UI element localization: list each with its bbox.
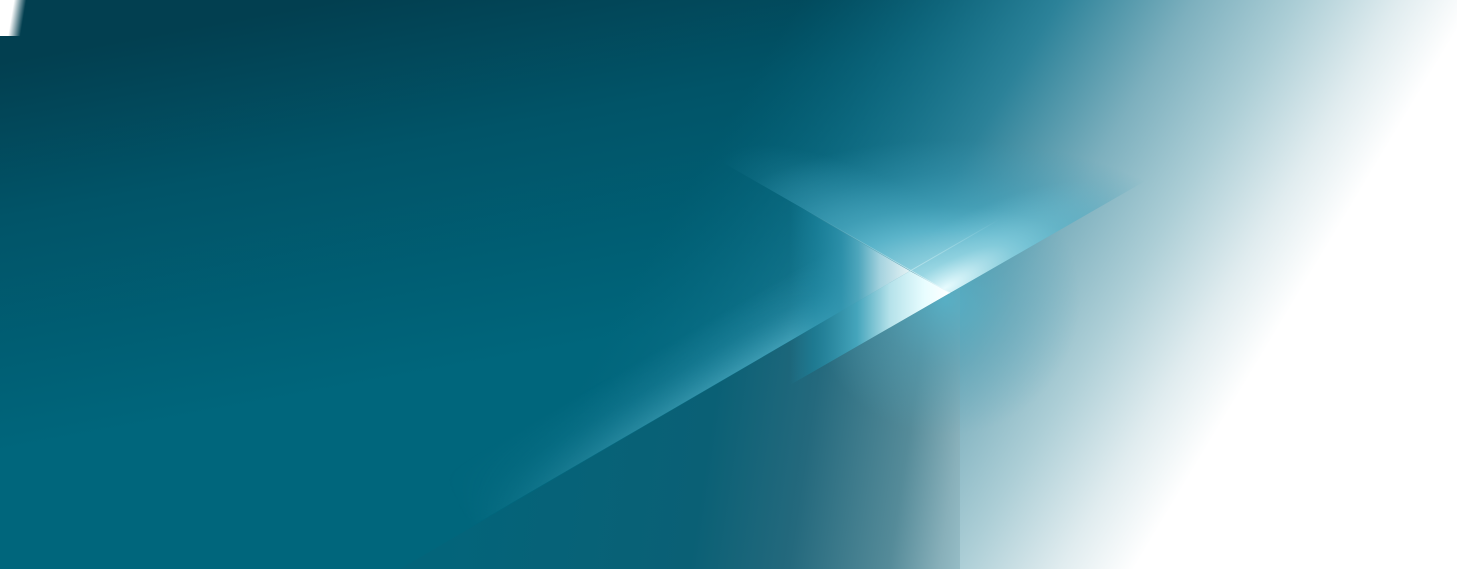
glow above the burst [715, 0, 1457, 293]
white corner chip [0, 0, 28, 36]
bright triangle left of the crossing [715, 158, 910, 385]
glow band along the main diagonal [510, 294, 838, 503]
bright band between the two diagonals [790, 271, 950, 385]
blue glow under the apex [700, 201, 1110, 500]
lower-left shaded region below the main diagonal [400, 271, 960, 569]
faint light streaks [800, 207, 1000, 293]
